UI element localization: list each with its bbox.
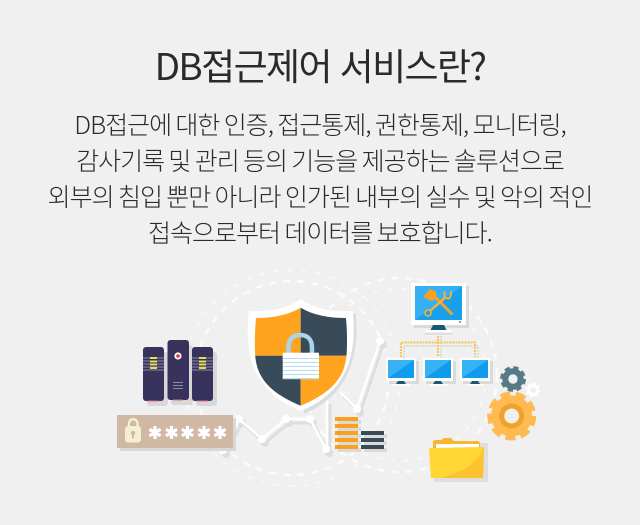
icon: folder — [429, 438, 488, 482]
icon: security shield — [248, 299, 356, 414]
icon: client monitor 3 — [460, 358, 493, 386]
network lines — [219, 337, 387, 458]
icon: client monitor 2 — [423, 358, 456, 386]
org chart connectors — [401, 333, 478, 358]
icon: main monitor with tools — [411, 283, 469, 335]
icon: server racks — [143, 340, 217, 406]
dashed orbit rings — [184, 270, 497, 486]
title: DB접근제어 서비스란? — [155, 37, 485, 91]
icon: client monitor 1 — [386, 358, 419, 386]
icon: shield lock — [283, 335, 319, 379]
icon: padlock — [125, 419, 141, 442]
icon: data stacks — [335, 417, 387, 452]
icon: gears — [490, 368, 539, 438]
password asterisks — [149, 426, 226, 439]
body text — [48, 106, 592, 250]
body text: 접속으로부터 데이터를 보호합니다. — [148, 214, 492, 250]
password box — [117, 415, 236, 451]
body text: 외부의 침입 뿐만 아니라 인가된 내부의 실수 및 악의 적인 — [48, 178, 592, 214]
body text: 감사기록 및 관리 등의 기능을 제공하는 솔루션으로 — [76, 142, 564, 178]
body text: DB접근에 대한 인증, 접근통제, 권한통제, 모니터링, — [74, 106, 566, 142]
icon: hammer and wrench — [423, 289, 452, 316]
